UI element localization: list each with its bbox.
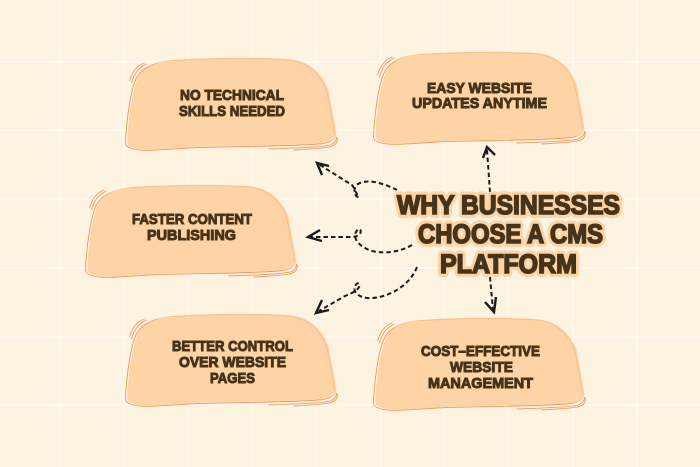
card: better control over website pages [126,314,338,406]
card text: SKILLS NEEDED [179,103,285,120]
card text [179,87,285,120]
card text [412,80,547,112]
card text: PUBLISHING [147,227,236,244]
card: easy website updates anytime [374,52,586,144]
card text [172,338,293,387]
card text: WEBSITE [450,359,513,376]
arrow: to easy updates card [483,147,495,192]
title: WHY BUSINESSES [397,190,620,220]
card text: EASY WEBSITE [427,80,532,97]
title: WHY BUSINESSES [397,190,620,220]
card text: FASTER CONTENT [132,211,252,228]
arrow: to better control card [316,267,417,313]
card text: UPDATES ANYTIME [412,95,547,112]
title: PLATFORM [440,249,577,279]
title: PLATFORM [440,249,577,279]
arrow: to cost-effective card [485,277,496,312]
card: cost-effective website management [374,318,586,410]
title [397,190,620,279]
title: CHOOSE A CMS [418,219,603,249]
card text: PAGES [210,370,255,387]
card text [421,343,540,392]
card: faster content publishing [86,185,298,277]
arrow: to no technical skills card [317,163,397,197]
card text: BETTER CONTROL [172,338,293,355]
card: no technical skills needed [126,58,338,150]
card text [132,211,252,244]
card text: OVER WEBSITE [179,354,286,371]
card text: COST–EFFECTIVE [421,343,540,360]
arrow: to faster content card [308,229,412,252]
title: CHOOSE A CMS [418,219,603,249]
card text: NO TECHNICAL [180,87,284,104]
card text: MANAGEMENT [428,375,533,392]
